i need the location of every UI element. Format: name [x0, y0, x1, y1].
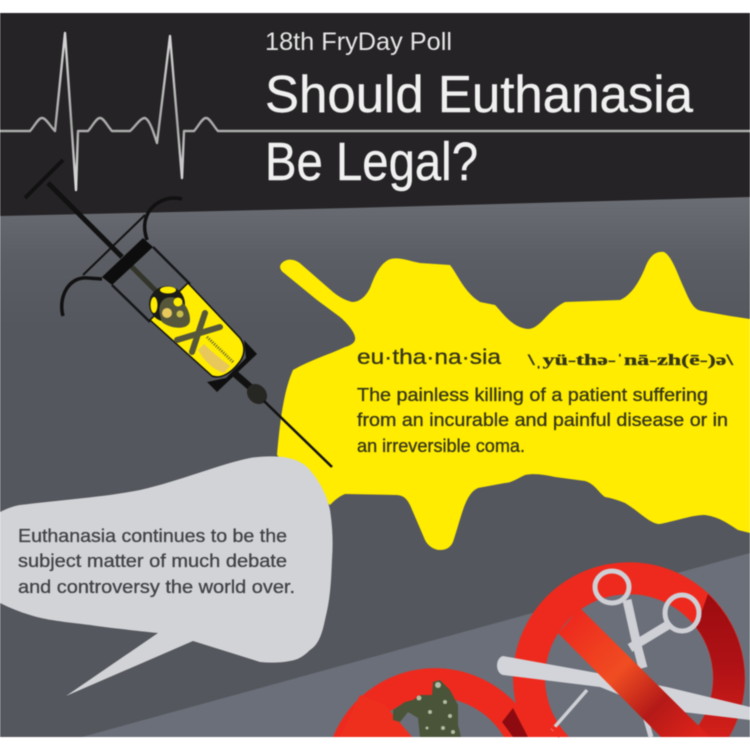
soldier — [393, 680, 461, 737]
scissors — [552, 571, 699, 737]
syringe — [25, 160, 332, 467]
prohibition signs — [333, 562, 750, 737]
skull — [159, 297, 190, 328]
heartbeat line — [0, 33, 750, 190]
definition — [357, 346, 734, 456]
measure ticks — [207, 337, 233, 362]
meaning: an irreversible coma. — [357, 435, 525, 456]
skull and crossbones — [149, 286, 233, 362]
speech bubble text: Euthanasia continues to be the — [18, 526, 287, 546]
speech bubble — [0, 456, 333, 696]
title: Be Legal? — [265, 132, 478, 192]
yellow splat — [277, 252, 750, 550]
bar start — [340, 695, 412, 737]
prohibition bar — [558, 608, 710, 737]
meaning — [357, 384, 728, 456]
finger flange — [62, 198, 182, 316]
speech bubble text: and controversy the world over. — [18, 577, 295, 597]
pronunciation: \ˌyü-thə-ˈnā-zh(ē-)ə\ — [527, 352, 734, 369]
barrel walls — [112, 247, 190, 322]
ring — [333, 668, 537, 737]
headword: eu·tha·na·sia — [357, 346, 501, 369]
barrel base — [207, 340, 257, 392]
sign: soldier — [333, 668, 537, 737]
liquid highlight — [198, 344, 230, 373]
poison liquid — [150, 283, 244, 377]
plunger — [25, 160, 160, 295]
skull medallion — [149, 286, 185, 322]
meaning: from an incurable and painful disease or in — [357, 409, 728, 430]
title — [265, 66, 693, 192]
nozzle — [233, 372, 257, 393]
ring shadow — [502, 708, 528, 737]
speech bubble text — [18, 526, 295, 597]
meaning: The painless killing of a patient suffering — [357, 384, 708, 405]
barrel collar — [102, 238, 153, 285]
speech bubble text: subject matter of much debate — [18, 551, 287, 571]
sign: surgical tools — [497, 562, 750, 737]
ring — [513, 562, 745, 737]
title: Should Euthanasia — [265, 66, 693, 124]
header band — [0, 13, 750, 216]
needle — [264, 401, 332, 467]
ring shadow — [689, 594, 745, 737]
poll label: 18th FryDay Poll — [265, 28, 452, 56]
scalpel — [497, 656, 750, 720]
crossbones — [177, 313, 220, 352]
hub — [243, 380, 271, 408]
